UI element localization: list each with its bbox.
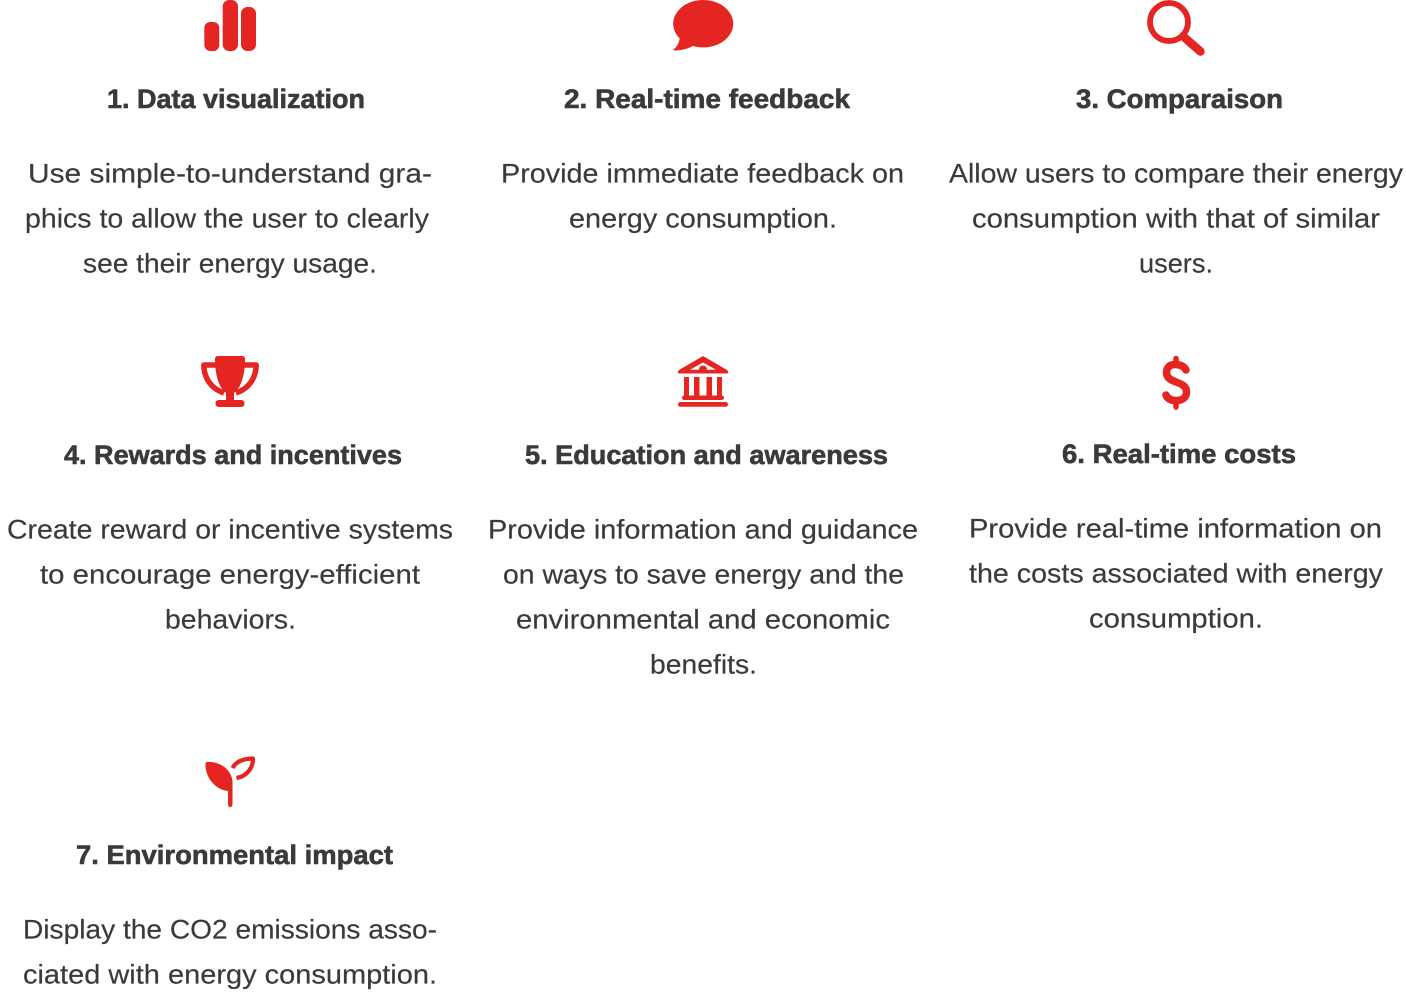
- panel: real-time feedback: [501, 0, 904, 234]
- text: education and awareness description: Provide information and guidance: [488, 515, 918, 545]
- panel: rewards and incentives: [7, 356, 453, 635]
- text: real-time feedback description: energy consumption.: [569, 204, 837, 234]
- heading: data visualization: 1. Data visualization: [107, 84, 365, 114]
- text: real-time costs description: [969, 514, 1384, 634]
- icon: trophy: [204, 356, 256, 407]
- text: comparaison description: Allow users to compare their energy: [949, 159, 1404, 189]
- text: data visualization description: Use simple-to-understand gra-: [28, 159, 432, 189]
- text: comparaison description: users.: [1139, 249, 1213, 279]
- panel: education and awareness: [488, 356, 918, 680]
- heading: education and awareness: 5. Education and awareness: [525, 440, 888, 470]
- icon: magnifying glass: [1150, 3, 1200, 52]
- heading: rewards and incentives: 4. Rewards and incentives: [64, 440, 402, 470]
- text: data visualization description: see their energy usage.: [83, 249, 377, 279]
- text: environmental impact description: ciated with energy consumption.: [23, 960, 437, 990]
- text: real-time costs description: Provide real-time information on: [969, 514, 1382, 544]
- heading: comparaison: 3. Comparaison: [1076, 84, 1283, 114]
- panel: real-time costs: [969, 358, 1384, 634]
- text: rewards and incentives description: Create reward or incentive systems: [7, 515, 453, 545]
- text: comparaison description: consumption with that of similar: [972, 204, 1380, 234]
- text: rewards and incentives description: [7, 515, 453, 635]
- text: real-time costs description: consumption.: [1089, 604, 1263, 634]
- heading: environmental impact: 7. Environmental impact: [76, 840, 393, 870]
- icon: speech bubble: [673, 0, 733, 50]
- text: real-time feedback description: [501, 159, 904, 234]
- text: data visualization description: phics to allow the user to clearly: [25, 204, 430, 234]
- heading: real-time costs: 6. Real-time costs: [1062, 439, 1296, 469]
- text: education and awareness description: benefits.: [650, 650, 757, 680]
- text: education and awareness description: on ways to save energy and the: [503, 560, 904, 590]
- panel: data visualization: [25, 0, 432, 279]
- text: education and awareness description: environmental and economic: [516, 605, 890, 635]
- icon: bank building: [678, 356, 728, 407]
- panel: environmental impact: [23, 758, 437, 990]
- text: data visualization description: [25, 159, 432, 279]
- text: rewards and incentives description: to encourage energy-efficient: [40, 560, 421, 590]
- text: comparaison description: [949, 159, 1404, 279]
- panel: comparaison: [949, 3, 1404, 279]
- icon: dollar sign: [1166, 358, 1186, 407]
- text: rewards and incentives description: behaviors.: [165, 605, 296, 635]
- heading: real-time feedback: 2. Real-time feedback: [564, 84, 851, 114]
- text: real-time costs description: the costs associated with energy: [969, 559, 1384, 589]
- text: real-time feedback description: Provide immediate feedback on: [501, 159, 904, 189]
- text: education and awareness description: [488, 515, 918, 680]
- icon: plant sprout: [205, 758, 253, 807]
- text: environmental impact description: Display the CO2 emissions asso-: [23, 915, 437, 945]
- icon: bar chart: [204, 0, 256, 51]
- text: environmental impact description: [23, 915, 437, 990]
